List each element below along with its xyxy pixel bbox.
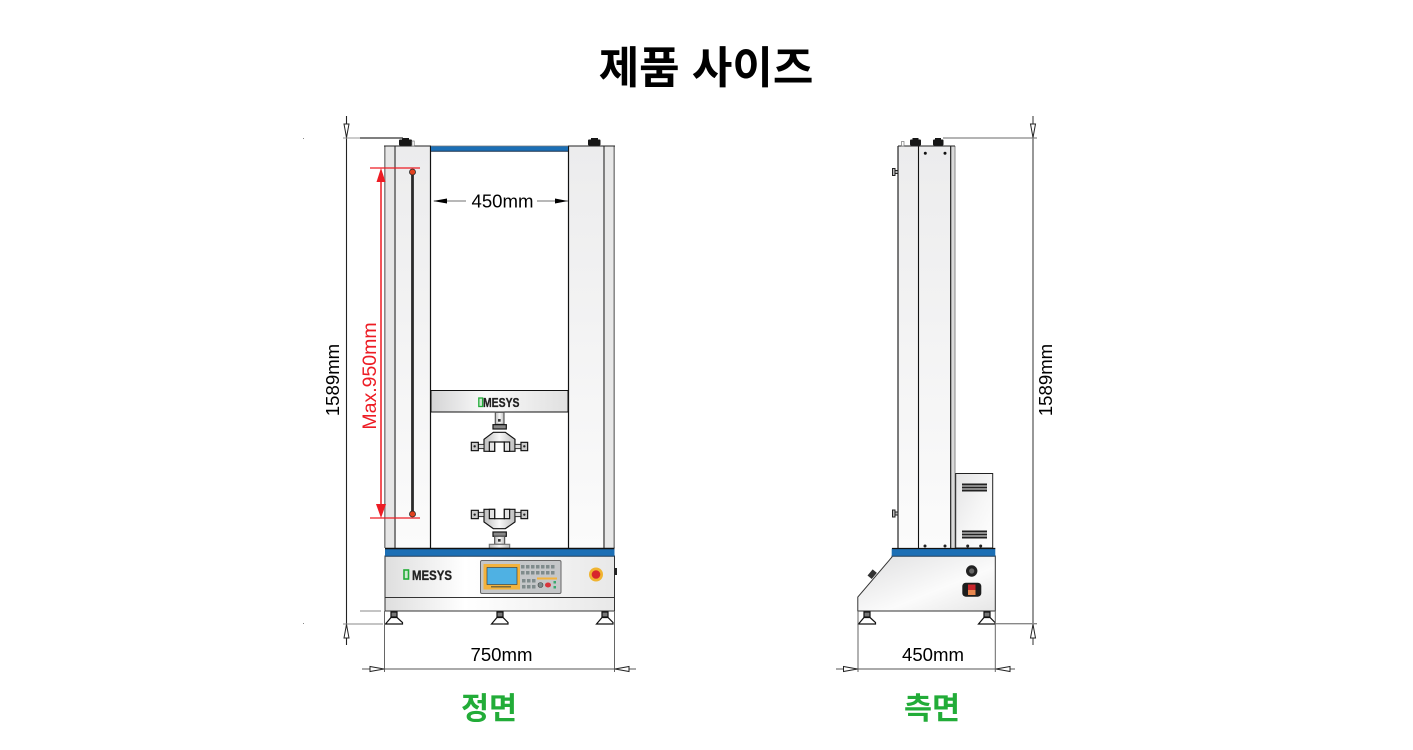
levelling feet [386, 612, 613, 624]
label: front view: 정면 [461, 692, 517, 726]
dimension: height 1589mm: 1589mm [1035, 344, 1056, 416]
emergency stop button [589, 568, 603, 582]
right column [568, 146, 615, 548]
electrical box [956, 474, 993, 548]
base [858, 548, 995, 611]
dimension: max stroke 950mm: Max.950mm [359, 322, 381, 430]
diagram: front view [303, 116, 636, 672]
control panel [480, 560, 561, 594]
levelling feet [858, 612, 995, 624]
base [385, 548, 617, 611]
top knobs [902, 138, 944, 146]
top knobs [399, 138, 600, 146]
top blue beam [431, 146, 568, 152]
dimension: inner width 450mm [433, 190, 568, 212]
power switch [962, 583, 981, 597]
label: side view: 측면 [904, 692, 960, 726]
dimension: height 1589mm: 1589mm [322, 344, 343, 416]
side limit knobs [892, 168, 898, 517]
dimension: depth 450mm: 450mm [902, 644, 964, 665]
left column [384, 146, 431, 548]
diagram: side view [836, 116, 1056, 672]
connector [868, 569, 877, 579]
dimension: depth 450mm [836, 611, 1015, 672]
dimension: max stroke 950mm [359, 168, 420, 518]
title: 제품 사이즈 [599, 44, 813, 93]
upper clamp [471, 412, 528, 451]
logo: base: MESYS [412, 568, 452, 583]
dimension: height 1589mm [943, 116, 1056, 645]
dimension: height 1589mm [303, 116, 403, 645]
dimension: inner width 450mm: 450mm [471, 190, 534, 212]
dimension: overall width 750mm: 750mm [470, 644, 533, 665]
logo: crosshead: MESYS [483, 396, 520, 410]
power knob [966, 565, 977, 577]
crosshead [431, 390, 568, 412]
red stroke range rod [410, 169, 416, 517]
lower clamp [471, 509, 528, 548]
column body [898, 146, 955, 548]
dimension: overall width 750mm [362, 611, 636, 672]
